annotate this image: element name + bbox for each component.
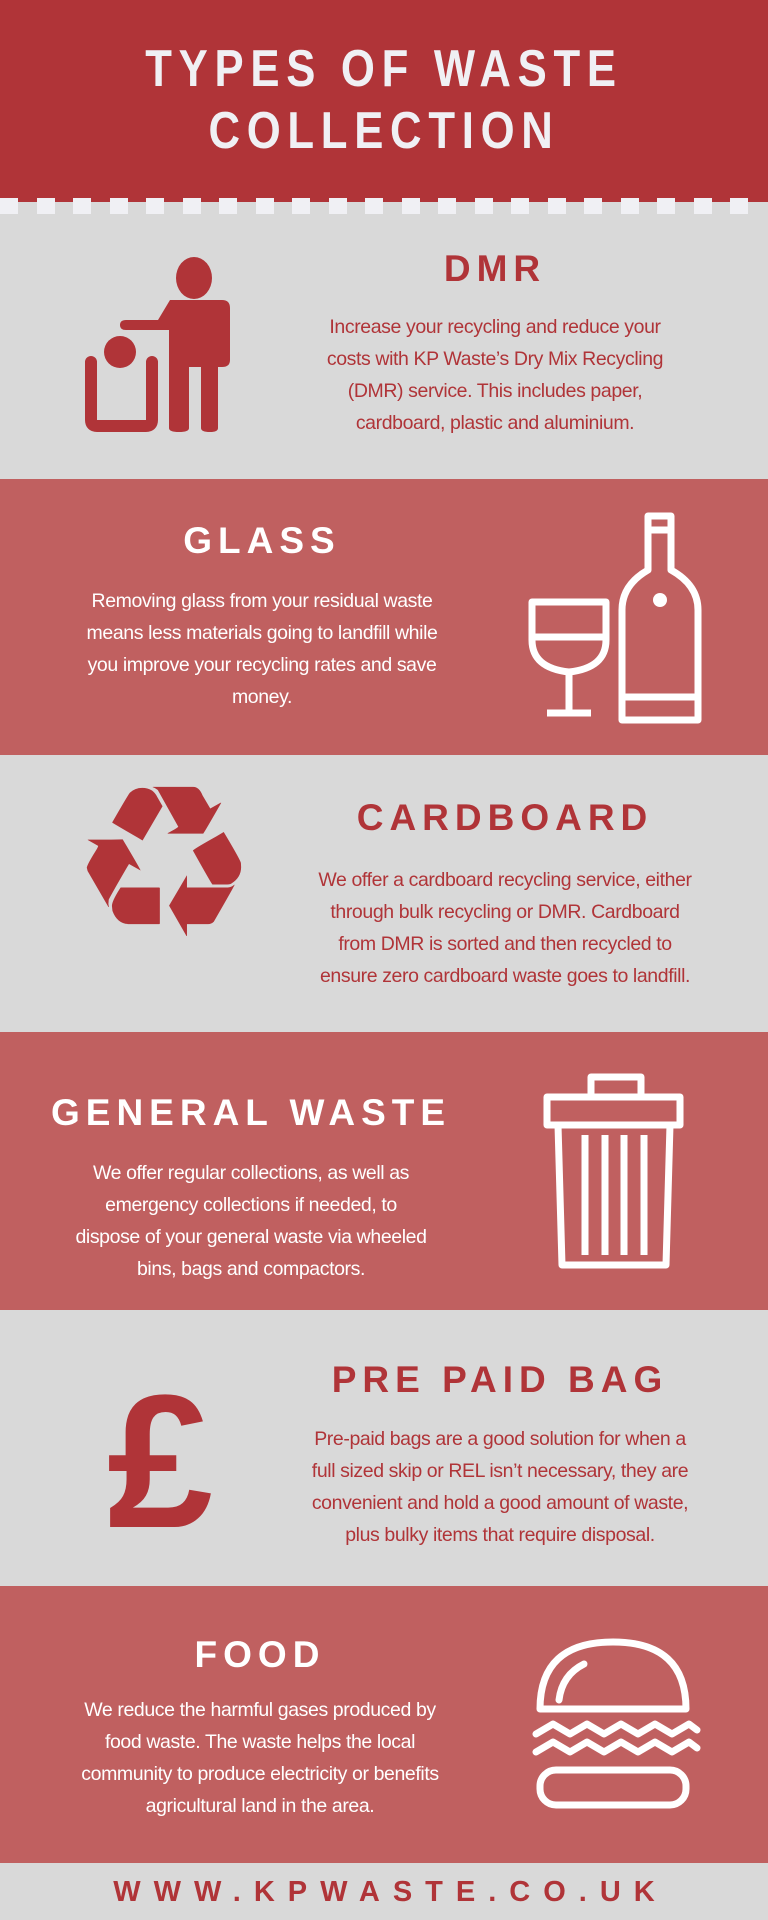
text: General waste: emergency collections if needed, to	[105, 1194, 397, 1216]
heading: Glass: GLASS	[183, 520, 341, 561]
text: Cardboard	[318, 869, 692, 987]
panel: General waste	[0, 1032, 768, 1310]
text: Cardboard: ensure zero cardboard waste goes to landfill.	[320, 965, 690, 987]
text: Cardboard: through bulk recycling or DMR. Cardboard	[330, 901, 680, 923]
text: Pre paid bag: Pre-paid bags are a good solution for when a	[314, 1428, 686, 1450]
text: DMR: costs with KP Waste’s Dry Mix Recycling	[327, 348, 663, 370]
icon: recycle: ♻	[69, 739, 259, 986]
text: Pre paid bag: plus bulky items that require disposal.	[345, 1524, 655, 1546]
icon: wine glass and bottle	[528, 512, 702, 724]
panel: Cardboard	[0, 755, 768, 1032]
title: TYPES OF WASTE	[145, 40, 623, 98]
text: DMR: cardboard, plastic and aluminium.	[356, 412, 634, 434]
icon: burger	[532, 1638, 700, 1808]
footer	[0, 1863, 768, 1920]
footer url: WWW.KPWASTE.CO.UK	[113, 1876, 668, 1908]
header	[0, 0, 768, 214]
text: Food: food waste. The waste helps the local	[105, 1731, 415, 1753]
text: General waste	[75, 1162, 427, 1280]
text: Pre paid bag: full sized skip or REL isn’t necessary, they are	[312, 1460, 688, 1482]
panel: Glass	[0, 479, 768, 755]
text: DMR	[327, 316, 663, 434]
heading: General waste: GENERAL WASTE	[51, 1092, 451, 1133]
text: Food	[81, 1699, 439, 1817]
heading: DMR: DMR	[444, 248, 546, 289]
text: Food: We reduce the harmful gases produced by	[84, 1699, 436, 1721]
text: General waste: We offer regular collections, as well as	[93, 1162, 409, 1184]
text: Glass	[87, 590, 437, 708]
text: Glass: means less materials going to landfill while	[87, 622, 437, 644]
title: COLLECTION	[208, 102, 560, 160]
text: Food: agricultural land in the area.	[146, 1795, 374, 1817]
text: DMR: Increase your recycling and reduce your	[329, 316, 661, 338]
text: Cardboard: We offer a cardboard recycling service, either	[318, 869, 692, 891]
text: General waste: bins, bags and compactors.	[137, 1258, 365, 1280]
title	[145, 40, 623, 160]
heading: Food: FOOD	[195, 1634, 325, 1675]
text: Glass: Removing glass from your residual waste	[92, 590, 432, 612]
text: Pre paid bag: convenient and hold a good amount of waste,	[312, 1492, 688, 1514]
panel: Pre paid bag	[0, 1310, 768, 1586]
icon: person and bin	[85, 257, 230, 432]
text: DMR: (DMR) service. This includes paper,	[348, 380, 642, 402]
icon: trash can	[544, 1074, 684, 1268]
panel: Food	[0, 1586, 768, 1863]
text: Pre paid bag	[312, 1428, 688, 1546]
text: Glass: you improve your recycling rates and save	[88, 654, 436, 676]
text: Food: community to produce electricity or benefits	[81, 1763, 439, 1785]
heading: Pre paid bag: PRE PAID BAG	[332, 1359, 668, 1400]
text: Glass: money.	[232, 686, 292, 708]
text: General waste: dispose of your general waste via wheeled	[75, 1226, 427, 1248]
heading: Cardboard: CARDBOARD	[357, 797, 653, 838]
dashed edge	[0, 198, 768, 214]
text: Cardboard: from DMR is sorted and then recycled to	[338, 933, 672, 955]
panel: DMR	[0, 214, 768, 479]
